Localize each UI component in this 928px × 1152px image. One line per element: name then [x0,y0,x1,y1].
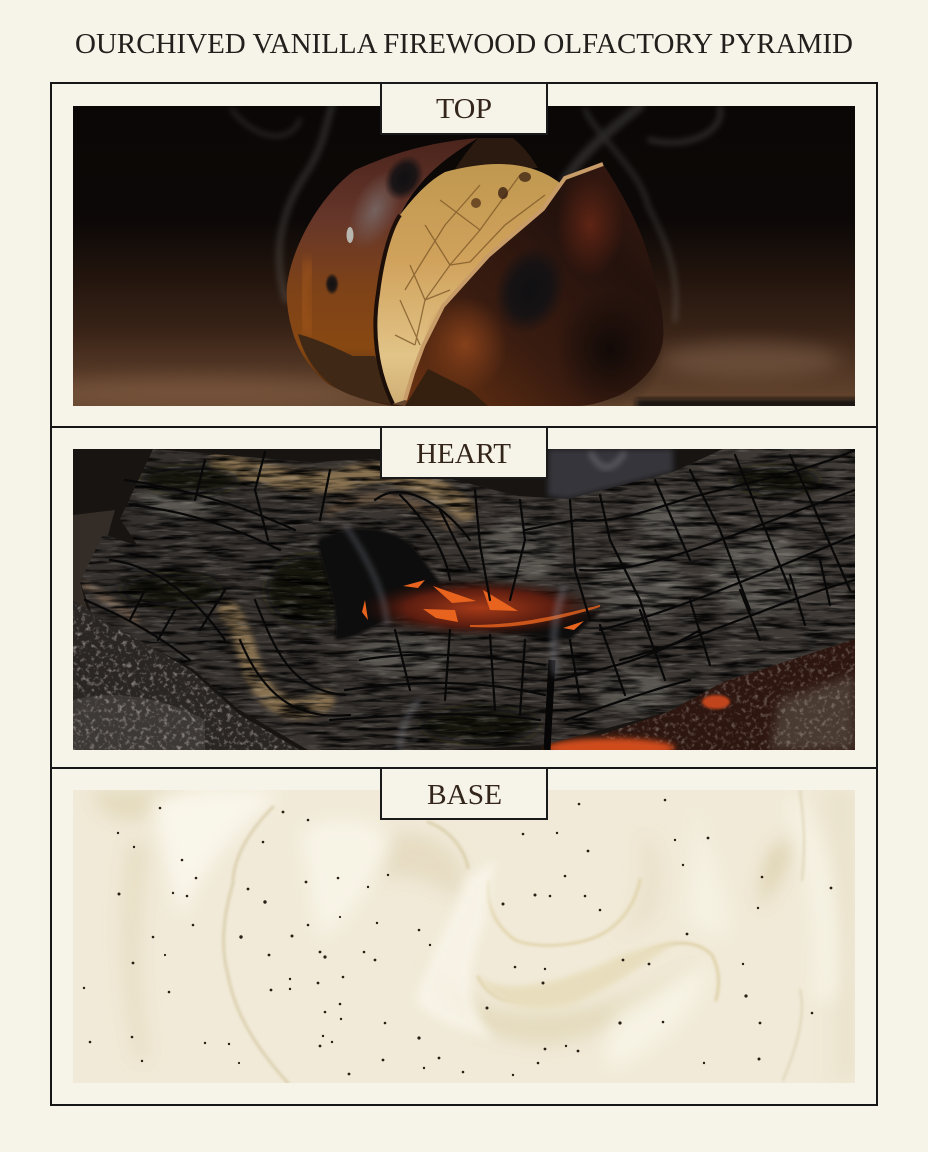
cream highlights [150,790,837,1070]
title: OURCHIVED VANILLA FIREWOOD OLFACTORY PYRAMID [75,28,853,60]
charcoal hollow [318,529,600,640]
tan bark highlights [85,462,465,708]
embers [362,580,600,636]
panel: top note image [30,106,861,410]
cracks in charred wood [85,450,855,720]
chestnut flesh [375,164,565,404]
smoke wisps [232,106,720,320]
light wood blocks [140,482,810,710]
label: base [381,768,547,819]
cream fold lines [224,790,804,1083]
chestnut right shell [405,164,665,410]
panel: base note image [73,790,855,1083]
smoke over embers [345,525,565,750]
label: heart [381,427,547,478]
outer frame with section dividers [51,83,877,1105]
label: base: BASE [427,779,502,811]
cream soft shading [90,790,855,1080]
label: top: TOP [436,93,492,125]
chestnut hull interior [455,138,538,170]
ash and rubble [73,449,855,758]
charred logs [73,449,855,750]
panel: heart note image [73,449,855,758]
chestnut seam shadow [375,215,400,404]
chestnut left shell [287,138,478,406]
vanilla specks [83,799,832,1076]
label: heart: HEART [416,438,511,470]
label: top [381,83,547,134]
chestnut [287,138,665,410]
dark char patches [120,466,820,743]
swirl peak [418,866,492,1038]
